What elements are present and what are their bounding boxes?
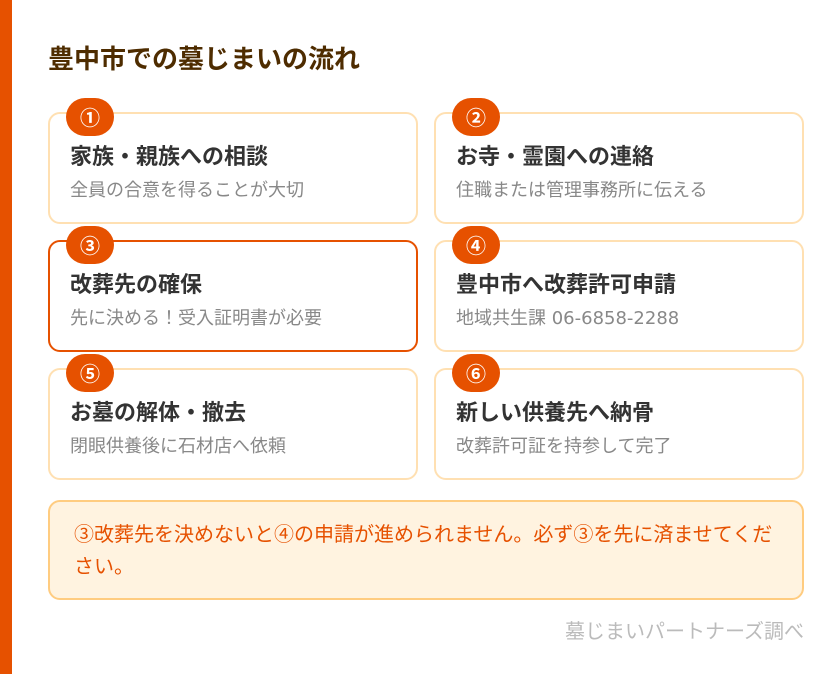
callout: note	[48, 500, 804, 600]
heading: step 6: 新しい供養先へ納骨	[456, 395, 654, 427]
panel: step 4	[434, 240, 804, 352]
badge: step 5: ⑤	[80, 358, 100, 387]
callout: note: ③改葬先を決めないと④の申請が進められません。必ず③を先に済ませてください。	[74, 518, 772, 579]
badge: step 5	[66, 354, 114, 392]
badge: step 2	[452, 98, 500, 136]
badge: step 4: ④	[466, 230, 486, 259]
text: step 3: 先に決める！受入証明書が必要	[70, 304, 322, 330]
text: step 2: 住職または管理事務所に伝える	[456, 176, 707, 202]
title: 豊中市での墓じまいの流れ	[48, 39, 360, 76]
panel: step 5	[48, 368, 418, 480]
badge: step 4	[452, 226, 500, 264]
badge: step 3: ③	[80, 230, 100, 259]
badge: step 2: ②	[466, 102, 486, 131]
panel: step 6	[434, 368, 804, 480]
badge: step 1: ①	[80, 102, 100, 131]
source: 墓じまいパートナーズ調べ	[565, 615, 804, 644]
badge: step 1	[66, 98, 114, 136]
heading: step 2: お寺・霊園への連絡	[456, 139, 654, 171]
badge: step 3	[66, 226, 114, 264]
text: step 1: 全員の合意を得ることが大切	[70, 176, 304, 202]
panel: step 2	[434, 112, 804, 224]
panel: step 3	[48, 240, 418, 352]
text: step 5: 閉眼供養後に石材店へ依頼	[70, 432, 286, 458]
heading: step 3: 改葬先の確保	[70, 267, 202, 299]
heading: step 1: 家族・親族への相談	[70, 139, 268, 171]
heading: step 5: お墓の解体・撤去	[70, 395, 246, 427]
accent bar	[0, 0, 12, 674]
badge: step 6	[452, 354, 500, 392]
badge: step 6: ⑥	[466, 358, 486, 387]
panel: step 1	[48, 112, 418, 224]
text: step 6: 改葬許可証を持参して完了	[456, 432, 671, 458]
text: step 4: 地域共生課 06-6858-2288	[456, 304, 679, 330]
heading: step 4: 豊中市へ改葬許可申請	[456, 267, 676, 299]
